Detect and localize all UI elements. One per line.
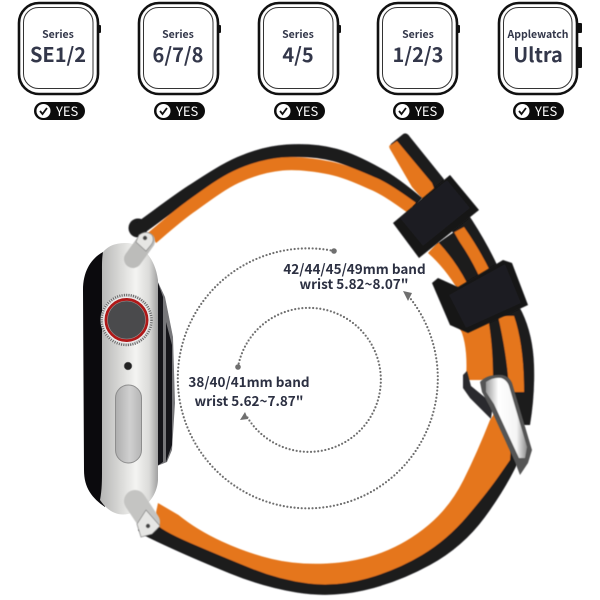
buckle xyxy=(463,371,532,475)
icon: Series SE1/2 watch: SE1/2 xyxy=(30,39,86,68)
watch body side view xyxy=(83,243,175,514)
label: small band: wrist 5.62~7.87" xyxy=(194,390,304,410)
strap loop: upper xyxy=(393,175,479,258)
icon: Series 6/7/8 watch: Series xyxy=(162,27,194,42)
icon: Series 1/2/3 watch xyxy=(378,3,460,94)
microphone dot xyxy=(124,362,132,370)
watch back case xyxy=(157,280,175,466)
dotted arc: small band size xyxy=(235,308,381,452)
lug: top xyxy=(133,232,153,259)
strap: upper band xyxy=(128,151,418,238)
digital crown xyxy=(100,294,152,346)
badge: 6/7/8 yes: YES xyxy=(175,101,199,120)
badge: Ultra yes xyxy=(513,101,564,120)
badge: SE1/2 yes: YES xyxy=(55,101,79,120)
badge: SE1/2 yes xyxy=(34,101,85,120)
icon: Series SE1/2 watch: Series xyxy=(42,27,74,42)
watch back dark inlay xyxy=(157,280,172,466)
icon: Series 1/2/3 watch: 1/2/3 xyxy=(393,39,443,68)
icon: Applewatch Ultra: Applewatch xyxy=(506,27,569,42)
badge: 4/5 yes: YES xyxy=(295,101,319,120)
badge: 6/7/8 yes xyxy=(154,101,205,120)
badge: Ultra yes: YES xyxy=(534,101,558,120)
strap loop: lower xyxy=(432,260,528,333)
label: large band xyxy=(283,258,426,293)
watch silver case xyxy=(100,243,158,514)
icon: Series 4/5 watch: 4/5 xyxy=(282,39,314,68)
icon: Series 4/5 watch xyxy=(259,3,341,94)
icon: Applewatch Ultra: Ultra xyxy=(513,39,563,68)
badge: 1/2/3 yes xyxy=(393,101,444,120)
label: small band: 38/40/41mm band xyxy=(188,371,310,391)
strap: lower band xyxy=(138,408,522,595)
icon: Series 6/7/8 watch xyxy=(139,3,221,94)
label: small band xyxy=(188,371,310,410)
badge: 4/5 yes xyxy=(274,101,325,120)
icon: Applewatch Ultra xyxy=(499,3,582,94)
icon: Series SE1/2 watch xyxy=(19,3,101,94)
icon: Series 6/7/8 watch: 6/7/8 xyxy=(153,39,203,68)
label: large band: wrist 5.82~8.07" xyxy=(299,273,409,293)
badge: 1/2/3 yes: YES xyxy=(414,101,438,120)
side button xyxy=(116,385,142,463)
lug: bottom xyxy=(135,501,160,537)
icon: Series 1/2/3 watch: Series xyxy=(402,27,434,42)
strap: tail end and outer edge xyxy=(389,133,534,425)
icon: Series 4/5 watch: Series xyxy=(282,27,314,42)
watch black glass side xyxy=(83,252,105,507)
label: large band: 42/44/45/49mm band xyxy=(283,258,426,278)
dotted arc: large band size xyxy=(178,248,438,508)
